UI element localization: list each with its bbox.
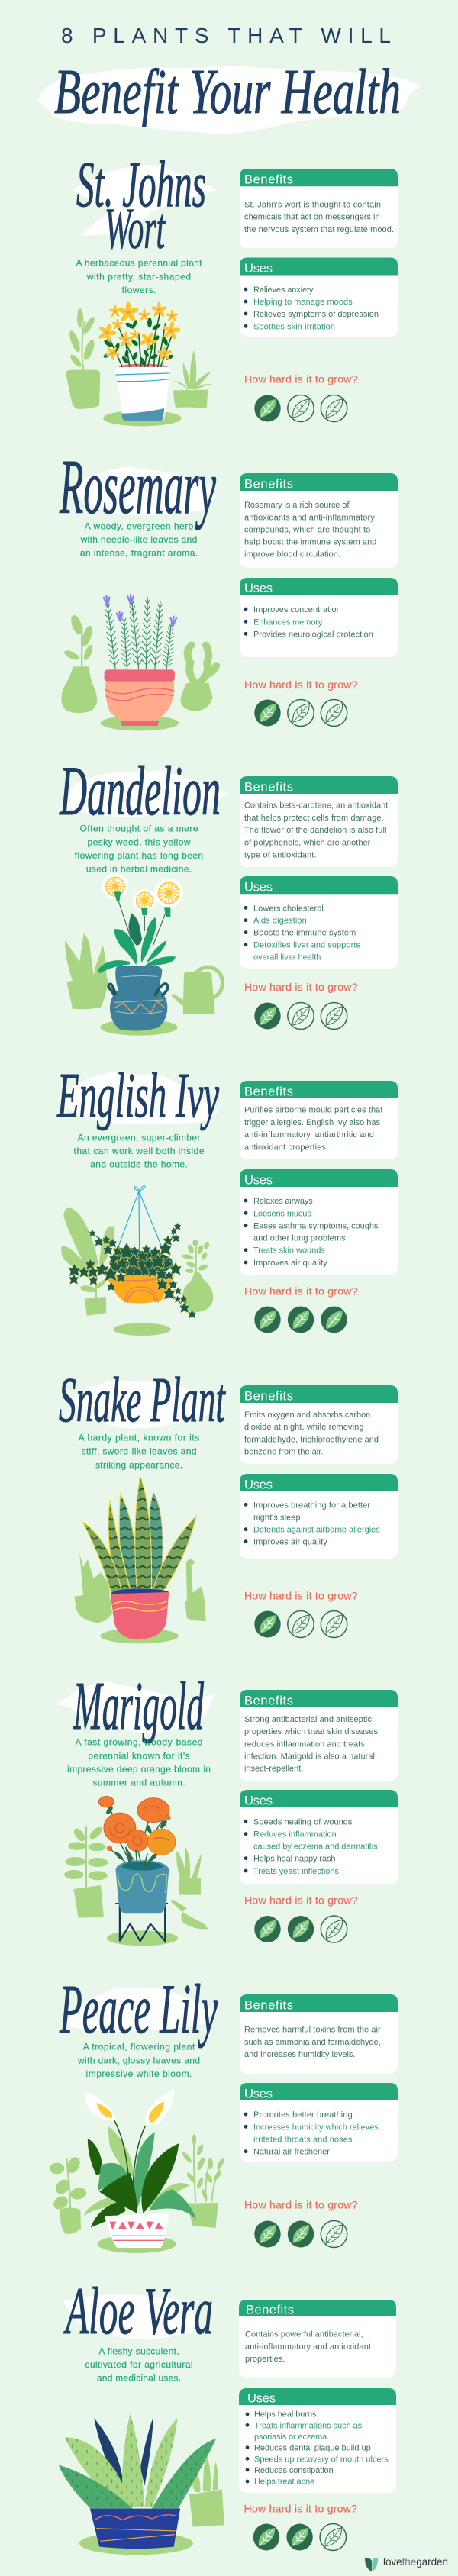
description: cultivated for agricultural bbox=[85, 2359, 193, 2370]
panel: uses: night's sleep bbox=[253, 1513, 301, 1522]
panel: uses bbox=[240, 1474, 398, 1559]
panel: uses: Improves breathing for a better bbox=[253, 1501, 370, 1510]
panel: benefits bbox=[240, 169, 398, 248]
panel: uses bbox=[240, 1790, 398, 1884]
section: Snake Plant bbox=[59, 1365, 398, 1643]
panel: uses: Soothes skin irritation bbox=[253, 322, 335, 331]
plant name: Marigold bbox=[73, 1668, 204, 1744]
panel: uses bbox=[240, 258, 398, 337]
panel: benefits: Benefits bbox=[244, 1085, 293, 1099]
panel: benefits: reduces inflammation and treats bbox=[244, 1739, 365, 1749]
section: Dandelion bbox=[59, 752, 398, 1036]
panel: uses: Treats yeast inflections bbox=[253, 1867, 339, 1876]
panel: uses: Helping to manage moods bbox=[253, 298, 353, 307]
description: A herbaceous perennial plant bbox=[76, 258, 202, 269]
panel: uses: Treats inflammations such as bbox=[254, 2421, 363, 2430]
growing difficulty bbox=[244, 1894, 358, 1942]
panel: benefits bbox=[240, 1385, 398, 1464]
plant name: Aloe Vera bbox=[63, 2275, 213, 2349]
plant name: English Ivy bbox=[56, 1060, 219, 1131]
panel: benefits: anti-inflammatory, antiarthritic and bbox=[244, 1130, 374, 1140]
panel: uses: Uses bbox=[244, 1794, 273, 1807]
description: an intense, fragrant aroma. bbox=[80, 548, 198, 559]
panel: uses: Uses bbox=[244, 262, 273, 276]
illustration: peace lily in patterned pot bbox=[50, 2089, 225, 2253]
illustration: aloe vera in navy pot bbox=[59, 2414, 224, 2555]
growing difficulty bbox=[244, 2199, 358, 2247]
panel: benefits: formaldehyde, trichloroethylene and bbox=[244, 1435, 379, 1444]
heading brush bbox=[57, 1681, 214, 1734]
panel: uses: Uses bbox=[244, 1174, 273, 1188]
heading brush bbox=[63, 2294, 202, 2339]
section: St. Johns Wort bbox=[66, 147, 398, 426]
panel: uses: Aids digestion bbox=[253, 917, 307, 926]
growing difficulty bbox=[244, 981, 358, 1029]
description: A woody, evergreen herb bbox=[85, 521, 194, 531]
section: Aloe Vera bbox=[59, 2275, 396, 2555]
panel: uses: irritated throats and noses bbox=[253, 2135, 353, 2144]
growing difficulty: How hard is it to grow? bbox=[244, 981, 358, 993]
growing difficulty bbox=[244, 679, 358, 727]
panel: benefits: help boost the immune system and bbox=[244, 538, 376, 547]
heading brush bbox=[73, 165, 218, 235]
panel: uses: Uses bbox=[247, 2392, 276, 2406]
panel: benefits: St. John's wort is thought to contain bbox=[244, 201, 381, 210]
panel: benefits: Emits oxygen and absorbs carbon bbox=[244, 1411, 370, 1420]
panel: benefits: compounds, which are thought to bbox=[244, 525, 370, 534]
panel: benefits: chemicals that act on messengers in bbox=[244, 213, 380, 222]
panel: benefits: Benefits bbox=[244, 1694, 293, 1708]
growing difficulty: How hard is it to grow? bbox=[244, 679, 358, 691]
panel: benefits: Benefits bbox=[244, 1389, 293, 1403]
description: A tropical, flowering plant bbox=[83, 2042, 195, 2052]
panel: uses: and other lung problems bbox=[253, 1234, 346, 1243]
panel: uses: caused by eczema and dermatitis bbox=[253, 1843, 378, 1852]
growing difficulty bbox=[244, 1590, 358, 1638]
growing difficulty bbox=[244, 373, 358, 421]
description bbox=[79, 1433, 199, 1470]
panel: uses: Promotes better breathing bbox=[253, 2110, 353, 2120]
description bbox=[77, 2042, 200, 2079]
panel: uses: psoriasis or eczema bbox=[254, 2433, 327, 2442]
description: A hardy plant, known for its bbox=[79, 1433, 199, 1443]
panel: uses: Lowers cholesterol bbox=[253, 904, 324, 913]
panel: benefits: Benefits bbox=[244, 1998, 293, 2012]
panel: benefits: Rosemary is a rich source of bbox=[244, 501, 350, 510]
plant name: Peace Lily bbox=[59, 1970, 218, 2048]
panel: benefits: Benefits bbox=[244, 780, 293, 794]
panel: benefits: Benefits bbox=[244, 172, 293, 186]
panel: benefits: of polyphenols, which are another bbox=[244, 838, 371, 847]
panel: uses: Uses bbox=[244, 881, 273, 895]
panel: benefits: Removes harmful toxins from the air bbox=[244, 2026, 381, 2035]
title: top line: 8 PLANTS THAT WILL bbox=[61, 24, 391, 47]
panel: benefits: that helps protect cells from damage. bbox=[244, 814, 383, 823]
growing difficulty bbox=[244, 2502, 357, 2551]
heading brush bbox=[67, 1380, 225, 1429]
panel: uses: Loosens mucus bbox=[253, 1209, 311, 1218]
panel: uses: Relaxes airways bbox=[253, 1197, 313, 1206]
section: English Ivy bbox=[56, 1060, 398, 1336]
growing difficulty bbox=[244, 1285, 358, 1333]
panel: benefits bbox=[239, 2300, 396, 2378]
panel: benefits bbox=[240, 473, 398, 568]
panel: benefits: The flower of the dandelion is also full bbox=[244, 826, 386, 835]
panel: benefits bbox=[240, 1081, 398, 1159]
plant name: St. Johns bbox=[76, 147, 206, 221]
section: Peace Lily bbox=[50, 1970, 398, 2253]
panel: uses: Natural air freshener bbox=[253, 2148, 330, 2157]
panel: uses: Helps treat acne bbox=[254, 2478, 314, 2487]
panel: benefits: the nervous system that regulate mood. bbox=[244, 225, 394, 234]
description: with needle-like leaves and bbox=[80, 534, 197, 545]
description: striking appearance. bbox=[95, 1459, 182, 1470]
description: used in herbal medicine. bbox=[86, 864, 192, 875]
illustration: marigolds in blue pot on stand bbox=[64, 1796, 208, 1946]
panel: benefits: type of antioxidant. bbox=[244, 850, 316, 859]
panel: uses: Relieves symptoms of depression bbox=[253, 310, 379, 319]
panel: benefits: infection. Marigold is also a natural bbox=[244, 1752, 375, 1761]
description: flowering plant has long been bbox=[75, 850, 203, 861]
section: Marigold bbox=[57, 1668, 398, 1946]
illustration: hanging ivy basket bbox=[61, 1186, 213, 1336]
panel: benefits: antioxidant properties. bbox=[244, 1143, 328, 1152]
description: pesky weed, this yellow bbox=[87, 837, 191, 847]
panel: uses: Helps heal nappy rash bbox=[253, 1855, 336, 1864]
panel: uses: Relieves anxiety bbox=[253, 285, 314, 295]
page title bbox=[38, 24, 421, 134]
description bbox=[67, 1737, 211, 1788]
heading brush bbox=[72, 467, 217, 515]
growing difficulty: How hard is it to grow? bbox=[244, 1285, 358, 1298]
panel: uses: Detoxifies liver and supports bbox=[253, 941, 360, 950]
panel: uses bbox=[240, 2083, 398, 2162]
description: summer and autumn. bbox=[92, 1778, 185, 1788]
panel: uses: overall liver health bbox=[253, 953, 321, 962]
growing difficulty: How hard is it to grow? bbox=[244, 2199, 358, 2211]
panel: uses: Improves air quality bbox=[253, 1538, 327, 1547]
panel: benefits: properties which treat skin diseases, bbox=[244, 1727, 380, 1736]
description: and outside the home. bbox=[90, 1159, 188, 1170]
logo: lovethegarden: lovethegarden bbox=[383, 2556, 448, 2568]
description bbox=[73, 1132, 205, 1170]
panel: uses: Enhances memory bbox=[253, 617, 323, 627]
description: flowers. bbox=[122, 285, 156, 295]
panel: uses: Helps heal burns bbox=[254, 2410, 317, 2420]
section: Rosemary bbox=[59, 444, 398, 730]
description bbox=[85, 2345, 193, 2384]
illustration: yellow flowers in white pot bbox=[66, 301, 212, 426]
panel: benefits: anti-inflammatory and antioxidant bbox=[245, 2342, 371, 2352]
title brush stroke bbox=[38, 66, 421, 134]
panel: benefits: trigger allergies. English Ivy also has bbox=[244, 1118, 380, 1127]
description: impressive white bloom. bbox=[86, 2068, 192, 2079]
panel: benefits bbox=[240, 1690, 398, 1781]
panel: benefits: properties. bbox=[245, 2355, 285, 2364]
panel: benefits: and increases humidity levels. bbox=[244, 2050, 355, 2059]
panel: uses: Increases humidity which relieves bbox=[253, 2123, 379, 2132]
growing difficulty: How hard is it to grow? bbox=[244, 1894, 358, 1907]
description: with dark, glossy leaves and bbox=[77, 2055, 200, 2065]
illustration: rosemary in terracotta pot bbox=[61, 595, 216, 730]
description bbox=[75, 824, 203, 875]
panel: uses: Reduces constipation bbox=[254, 2466, 334, 2475]
description: Often thought of as a mere bbox=[79, 824, 198, 834]
illustration: snake plant in pink pot bbox=[75, 1476, 206, 1643]
panel: benefits bbox=[240, 1994, 398, 2074]
panel: uses: Uses bbox=[244, 2087, 273, 2100]
panel: benefits: dioxide at night, while removing bbox=[244, 1423, 363, 1432]
description: impressive deep orange bloom in bbox=[67, 1764, 211, 1775]
heading brush bbox=[66, 1987, 218, 2032]
description: stiff, sword-like leaves and bbox=[81, 1446, 197, 1456]
description: A fast growing, woody-based bbox=[76, 1737, 202, 1748]
panel: benefits: antioxidants and anti-inflammatory bbox=[244, 513, 375, 522]
plant name: Dandelion bbox=[59, 752, 221, 830]
plant name: Rosemary bbox=[59, 444, 216, 530]
panel: benefits: benzene from the air. bbox=[244, 1447, 323, 1456]
panel: benefits bbox=[240, 776, 398, 867]
description: A fleshy succulent, bbox=[98, 2345, 179, 2356]
panel: benefits: Purifies airborne mould particles that bbox=[244, 1106, 382, 1115]
panel: uses: Eases asthma symptoms, coughs bbox=[253, 1221, 379, 1230]
panel: uses: Boosts the immune system bbox=[253, 929, 356, 938]
description: and medicinal uses. bbox=[97, 2373, 181, 2384]
description: perennial known for it's bbox=[88, 1750, 190, 1761]
panel: benefits: such as ammonia and formaldehyde, bbox=[244, 2038, 381, 2047]
panel: uses: Speeds up recovery of mouth ulcers bbox=[254, 2455, 389, 2464]
panel: benefits: Benefits bbox=[244, 478, 293, 492]
panel: benefits: Contains beta-carotene, an antioxidant bbox=[244, 801, 388, 811]
illustration: dandelion in blue urn bbox=[65, 873, 223, 1036]
heading brush bbox=[61, 771, 227, 817]
panel: uses: Speeds healing of wounds bbox=[253, 1817, 353, 1826]
panel: uses: Reduces dental plaque build up bbox=[254, 2444, 371, 2453]
panel: benefits: Contains powerful antibacterial, bbox=[245, 2330, 363, 2339]
panel: uses: Improves concentration bbox=[253, 605, 341, 614]
panel: uses: Defends against airborne allergies bbox=[253, 1526, 380, 1535]
description: An evergreen, super-climber bbox=[78, 1132, 200, 1143]
description: that can work well both inside bbox=[73, 1146, 205, 1156]
heading brush bbox=[59, 1072, 219, 1124]
panel: uses: Treats skin wounds bbox=[253, 1246, 325, 1256]
plant name: Wort bbox=[105, 197, 166, 261]
panel: uses: Provides neurological protection bbox=[253, 630, 373, 639]
panel: uses bbox=[239, 2388, 396, 2493]
panel: benefits: Benefits bbox=[246, 2304, 294, 2317]
description bbox=[80, 521, 198, 559]
growing difficulty: How hard is it to grow? bbox=[244, 2502, 357, 2514]
growing difficulty: How hard is it to grow? bbox=[244, 1590, 358, 1602]
panel: uses: Reduces inflammation bbox=[253, 1830, 337, 1839]
panel: uses: Improves air quality bbox=[253, 1259, 327, 1268]
growing difficulty: How hard is it to grow? bbox=[244, 373, 358, 385]
logo: lovethegarden bbox=[365, 2556, 448, 2571]
plant name: Snake Plant bbox=[59, 1365, 226, 1436]
panel: uses: Uses bbox=[244, 1478, 273, 1491]
description bbox=[76, 258, 202, 295]
description: with pretty, star-shaped bbox=[86, 271, 191, 282]
panel: benefits: insect-repellent. bbox=[244, 1765, 303, 1774]
panel: benefits: improve blood circulation. bbox=[244, 550, 340, 559]
panel: uses: Uses bbox=[244, 582, 273, 595]
panel: benefits: Strong antibacterial and antiseptic bbox=[244, 1715, 372, 1724]
panel: uses bbox=[240, 578, 398, 657]
panel: uses bbox=[240, 876, 398, 969]
plant name bbox=[76, 147, 206, 261]
panel: uses bbox=[240, 1169, 398, 1275]
